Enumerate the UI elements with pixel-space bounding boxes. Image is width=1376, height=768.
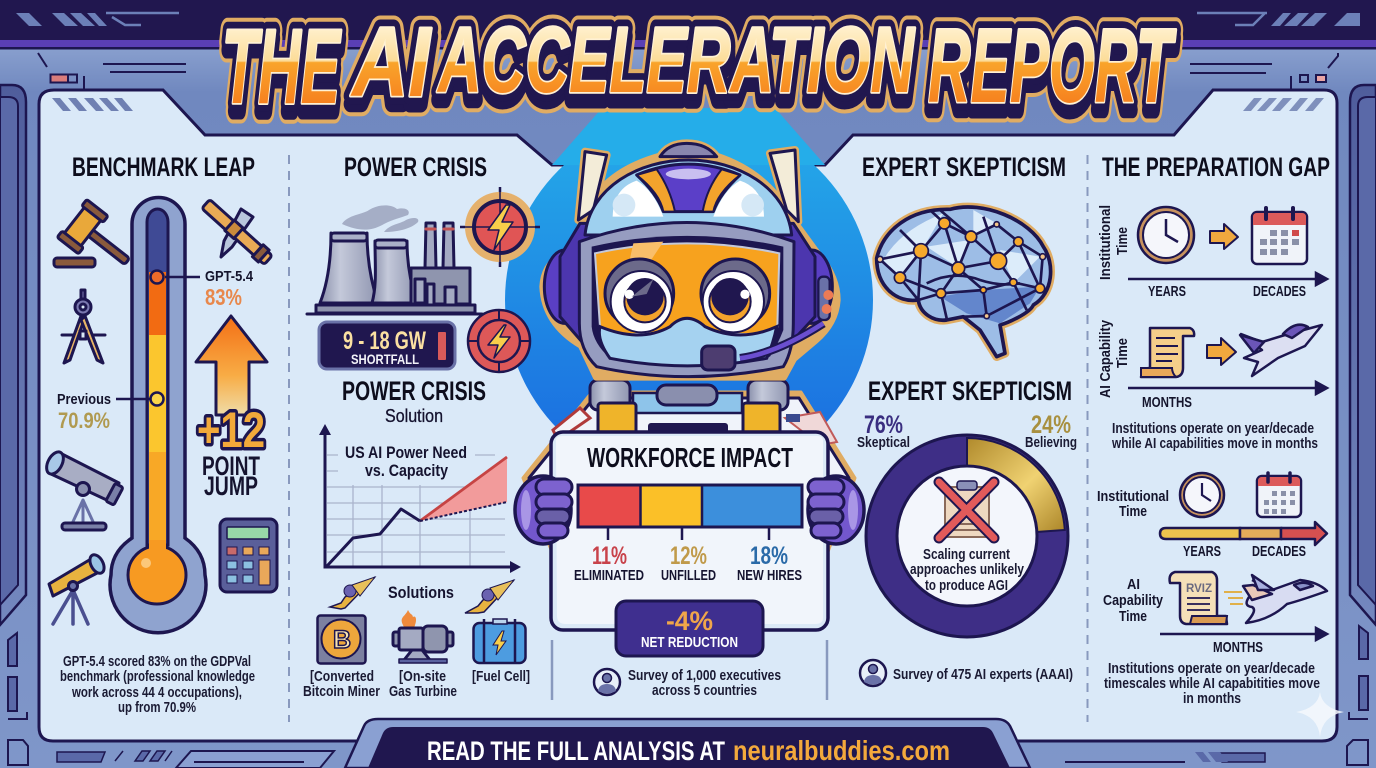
icon: lightning badge large xyxy=(460,187,540,267)
title: ACCELERATION xyxy=(437,8,915,112)
icon: jet xyxy=(1243,575,1327,623)
column dividers xyxy=(289,155,1088,722)
title: REPORT xyxy=(928,8,1176,125)
marker: gpt-5.4: GPT-5.4 xyxy=(205,268,254,285)
panel corner hatch marks right xyxy=(1243,98,1324,111)
icon: fuel cell xyxy=(474,619,526,664)
title: THE xyxy=(222,16,342,134)
marker: gpt-5.4 xyxy=(150,268,254,310)
lower ai capability time row: Time xyxy=(1119,608,1147,625)
dome xyxy=(585,160,792,235)
callout: +12 point jump xyxy=(197,402,265,501)
stat: unfilled: UNFILLED xyxy=(661,567,716,584)
icon: clock xyxy=(1180,473,1224,517)
lower ai capability time row: Capability xyxy=(1103,592,1164,609)
right pillar detail xyxy=(1350,85,1376,625)
upper institutional time row xyxy=(1097,205,1327,300)
panel: power crisis xyxy=(303,152,540,700)
text: benchmark description: work across 44 4 occupations), xyxy=(71,684,242,701)
mascot body xyxy=(523,380,855,560)
arrow: months to fast xyxy=(1207,338,1236,365)
marker: previous xyxy=(57,391,164,433)
sign highlight xyxy=(556,436,823,624)
lower institutional time row: DECADES xyxy=(1252,543,1306,560)
arrow: timeline xyxy=(1128,382,1327,394)
sparkle mark xyxy=(1296,692,1344,737)
stat: unfilled: 12% xyxy=(670,542,707,570)
chart: thermometer xyxy=(57,198,254,633)
panel: expert skepticism xyxy=(857,152,1077,686)
solutions row: [Fuel Cell] xyxy=(472,668,530,685)
icon: rocket left xyxy=(330,577,375,609)
lower ai capability time row xyxy=(1103,572,1327,707)
stat: believing: Believing xyxy=(1025,434,1077,451)
icon: power plant xyxy=(307,205,482,314)
main light panel xyxy=(39,90,1337,741)
callout: 9-18 GW shortfall: SHORTFALL xyxy=(351,351,419,367)
icon: neural brain xyxy=(877,207,1051,357)
eyes xyxy=(605,259,674,328)
title: ACCELERATION xyxy=(437,16,915,120)
icon: bitcoin miner: B xyxy=(333,626,351,654)
arrow: timeline xyxy=(1160,628,1327,640)
bottom banner: neuralbuddies.com xyxy=(733,735,950,766)
icon: calendar xyxy=(1252,208,1307,264)
callout: net reduction xyxy=(616,601,763,656)
callout: 9-18 GW shortfall xyxy=(319,322,455,369)
upper ai capability time row: MONTHS xyxy=(1142,394,1192,411)
title: AI xyxy=(350,15,431,125)
heading: expert skepticism 2: EXPERT SKEPTICISM xyxy=(868,376,1072,406)
stat: believing xyxy=(1025,411,1077,451)
solutions row: Gas Turbine xyxy=(389,683,457,700)
source: survey of executives: across 5 countries xyxy=(652,682,757,699)
chart: power need vs capacity: vs. Capacity xyxy=(365,461,448,480)
earcups xyxy=(544,250,586,323)
heading: power crisis solution: POWER CRISIS xyxy=(342,376,486,406)
title: ACCELERATION xyxy=(437,8,915,112)
title: REPORT xyxy=(928,16,1176,133)
stat: unfilled xyxy=(661,542,716,584)
mascot: astronaut robot xyxy=(523,143,855,560)
title: REPORT xyxy=(928,8,1176,125)
icon: calculator xyxy=(220,519,277,592)
icon: lightning badge small xyxy=(468,310,530,372)
title: THE xyxy=(222,8,342,126)
stat: skeptical: 76% xyxy=(864,411,903,439)
icon: calendar xyxy=(1257,473,1301,517)
title: AI xyxy=(350,7,431,117)
heading: workforce impact: WORKFORCE IMPACT xyxy=(587,442,793,473)
title: THE xyxy=(222,8,342,126)
title: ACCELERATION xyxy=(437,16,915,120)
icon: left fist xyxy=(515,476,572,544)
chart: donut 76 / 24: to produce AGI xyxy=(925,577,1008,594)
lower ai capability time row: in months xyxy=(1183,690,1241,707)
heading: expert skepticism: EXPERT SKEPTICISM xyxy=(862,152,1066,182)
marker: previous: 70.9% xyxy=(58,408,110,433)
stat: eliminated: 11% xyxy=(592,542,627,570)
stat: believing: 24% xyxy=(1031,411,1071,439)
icon: scroll xyxy=(1141,328,1194,377)
icon: jet xyxy=(1240,325,1322,376)
panel: the preparation gap xyxy=(1097,152,1330,707)
source: survey of ai experts xyxy=(860,660,1073,686)
stat: skeptical: Skeptical xyxy=(857,434,910,451)
icon: scroll: RVIZ xyxy=(1186,581,1212,595)
lower ai capability time row: Institutions operate on year/decade xyxy=(1108,660,1315,677)
source: survey of executives xyxy=(594,667,781,699)
icon: drafting compass xyxy=(62,290,105,363)
lower institutional time row: Institutional xyxy=(1097,488,1169,505)
upper institutional time row: YEARS xyxy=(1148,283,1186,300)
upper ai capability time row xyxy=(1097,319,1327,452)
icon: bitcoin miner xyxy=(318,616,366,664)
title: THE xyxy=(222,16,342,134)
heading: power crisis solution xyxy=(342,376,486,426)
lower ai capability time row: timescales while AI capabitities move xyxy=(1104,675,1320,692)
arrow: colored timeline xyxy=(1160,522,1327,545)
solutions row xyxy=(303,577,530,700)
title: REPORT xyxy=(928,8,1176,125)
microphone xyxy=(740,323,823,358)
bottom strip detail xyxy=(57,751,1265,762)
chart: power need vs capacity: US AI Power Need xyxy=(345,443,467,462)
stat: eliminated: ELIMINATED xyxy=(574,567,644,584)
heading: power crisis: POWER CRISIS xyxy=(344,152,487,182)
callout: net reduction: NET REDUCTION xyxy=(641,634,738,651)
upper ai capability time row: while AI capabilities move in months xyxy=(1111,435,1318,452)
callout: +12 point jump: +12 xyxy=(197,402,265,458)
icon: rocket right xyxy=(465,580,514,613)
icon: gas turbine xyxy=(393,610,453,663)
icon: crossed clipboard xyxy=(939,481,994,538)
solutions row: [On-site xyxy=(399,668,446,685)
title: AI xyxy=(350,7,431,117)
callout: +12 point jump: JUMP xyxy=(204,471,258,501)
stat: new hires: NEW HIRES xyxy=(737,567,802,584)
chart: donut 76 / 24: approaches unlikely xyxy=(910,561,1025,578)
lower institutional time row: YEARS xyxy=(1183,543,1221,560)
callout: net reduction: -4% xyxy=(666,606,713,636)
chart: donut 76 / 24 xyxy=(866,435,1068,637)
solutions row: [Converted xyxy=(310,668,374,685)
source: survey of ai experts: Survey of 475 AI experts (AAAI) xyxy=(893,666,1073,683)
marker: gpt-5.4: 83% xyxy=(205,284,242,310)
solutions row: Bitcoin Miner xyxy=(303,683,380,700)
callout: 9-18 GW shortfall: 9 - 18 GW xyxy=(343,327,426,355)
upper institutional time row: Institutional xyxy=(1097,205,1114,280)
icon: telescope xyxy=(43,449,123,530)
upper institutional time row: DECADES xyxy=(1253,283,1306,300)
text: benchmark description: GPT-5.4 scored 83% on the GDPVal xyxy=(63,653,251,670)
title: AI xyxy=(350,7,431,117)
title: THE xyxy=(222,8,342,126)
bottom banner xyxy=(345,719,1030,768)
solutions row: Solutions xyxy=(388,583,454,602)
text: benchmark description xyxy=(60,653,255,716)
arrow: years to decades xyxy=(1210,224,1238,249)
source: survey of executives: Survey of 1,000 executives xyxy=(628,667,781,684)
lower ai capability time row: AI xyxy=(1127,576,1140,593)
upper ai capability time row: Time xyxy=(1114,338,1131,368)
lower institutional time row xyxy=(1097,473,1327,560)
stat: skeptical xyxy=(857,411,910,451)
chart: donut 76 / 24: Scaling current xyxy=(923,546,1010,563)
panel corner hatch marks xyxy=(52,98,133,111)
title: AI xyxy=(350,15,431,125)
bottom banner: READ THE FULL ANALYSIS AT xyxy=(427,736,725,766)
arrow: jump xyxy=(196,316,267,415)
title: REPORT xyxy=(928,16,1176,133)
upper ai capability time row: AI Capability xyxy=(1097,319,1114,398)
arrow: timeline xyxy=(1128,273,1327,285)
chart: power need vs capacity xyxy=(319,424,521,573)
upper ai capability time row: Institutions operate on year/decade xyxy=(1112,420,1314,437)
icon: clock xyxy=(1138,207,1194,263)
mascot head xyxy=(543,143,837,377)
text: benchmark description: up from 70.9% xyxy=(118,699,196,716)
text: benchmark description: benchmark (professional knowledge xyxy=(60,668,255,685)
left pillar detail xyxy=(0,85,26,625)
blue circle behind mascot xyxy=(505,108,873,484)
antennae xyxy=(578,150,798,222)
heading: power crisis solution: Solution xyxy=(385,406,443,426)
icon: right fist xyxy=(808,476,864,544)
panel: workforce impact xyxy=(515,432,864,699)
title xyxy=(222,7,1176,134)
stat: new hires xyxy=(737,542,802,584)
title: ACCELERATION xyxy=(437,8,915,112)
face frame xyxy=(579,222,794,377)
lower ai capability time row: MONTHS xyxy=(1213,639,1263,656)
lower institutional time row: Time xyxy=(1119,503,1147,520)
upper institutional time row: Time xyxy=(1114,227,1131,255)
callout: +12 point jump: POINT xyxy=(202,451,260,481)
icon: crossed tools xyxy=(200,198,274,266)
sign board xyxy=(551,432,828,630)
stat: eliminated xyxy=(574,542,644,584)
stat: new hires: 18% xyxy=(750,542,788,570)
icon: gavel xyxy=(54,199,142,280)
icon: scroll xyxy=(1170,572,1243,624)
panel: benchmark leap xyxy=(43,152,277,716)
icon: small telescope xyxy=(49,552,107,624)
marker: previous: Previous xyxy=(57,391,111,408)
stacked bar xyxy=(578,485,802,540)
heading: benchmark leap: BENCHMARK LEAP xyxy=(72,152,255,182)
